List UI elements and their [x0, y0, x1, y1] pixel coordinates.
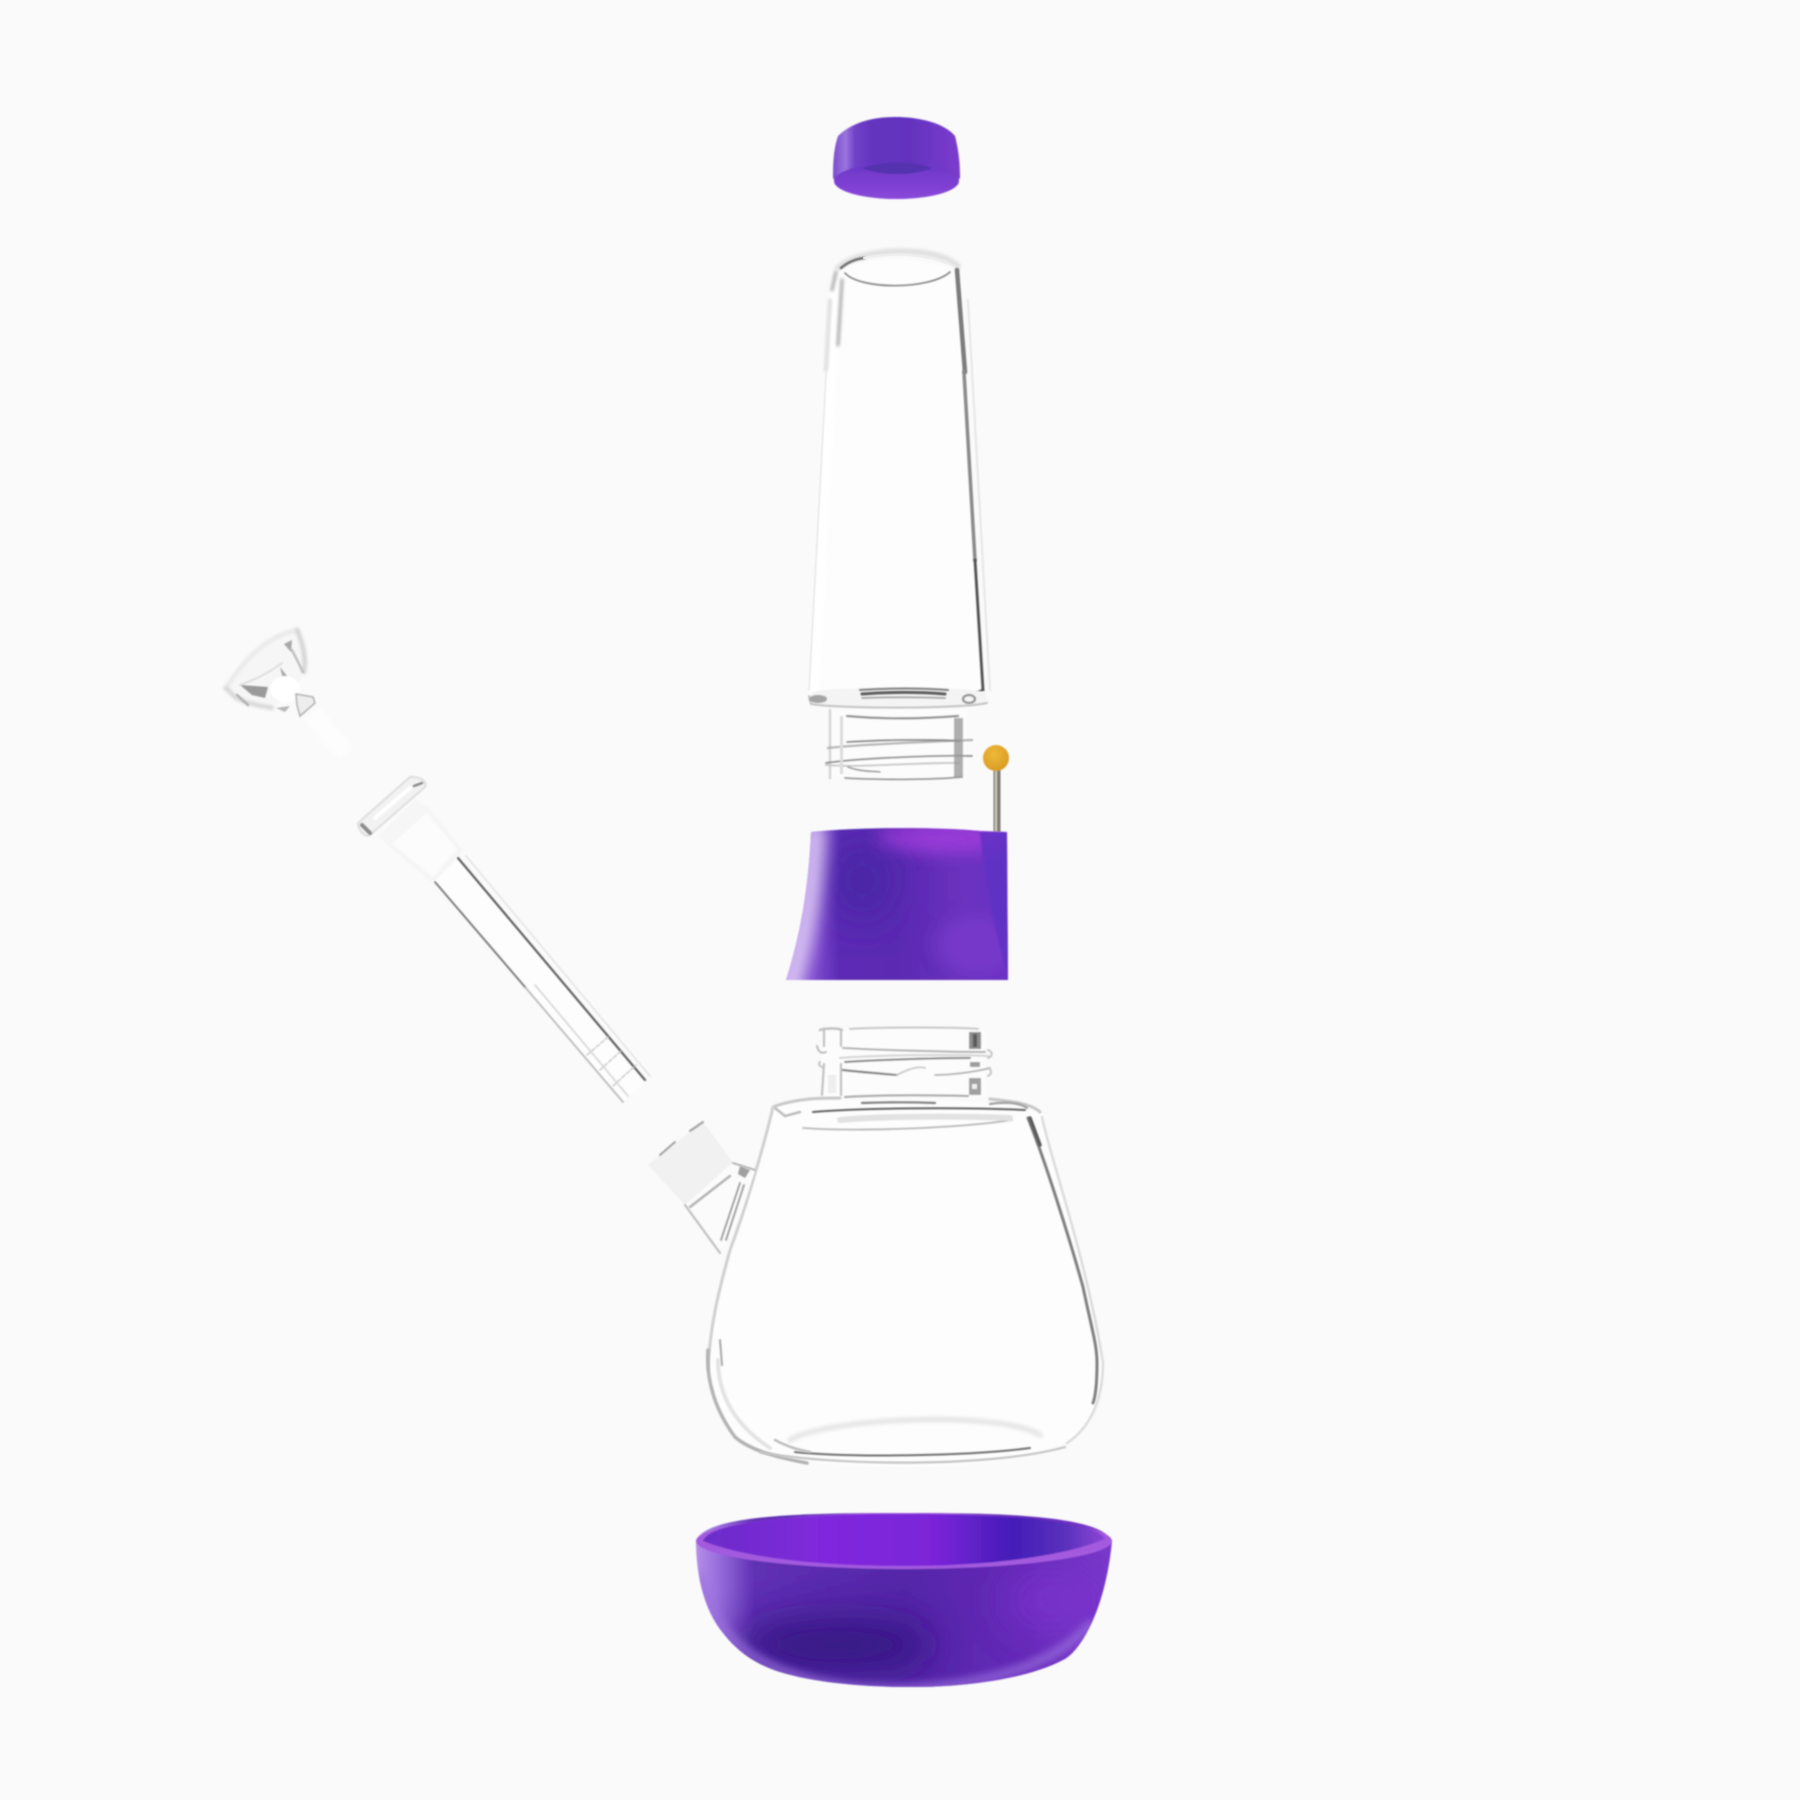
- purple silicone base bowl: [696, 1513, 1115, 1689]
- bowl shading: [700, 1574, 1102, 1688]
- collar body: [786, 828, 1008, 980]
- bottle shoulder: [775, 1095, 1040, 1130]
- tube interior: [810, 260, 984, 690]
- cap recess: [862, 163, 932, 174]
- cap body: [833, 117, 960, 199]
- tube right wall: [957, 270, 965, 372]
- cap inner rim: [834, 163, 959, 199]
- pin ball: [983, 745, 1009, 771]
- downstem frosted joint: [387, 807, 460, 880]
- bottle walls: [1028, 1118, 1097, 1403]
- bowl interior: [703, 1514, 1105, 1566]
- glass downstem: [358, 777, 650, 1102]
- bottle threaded neck: [817, 1028, 992, 1097]
- purple silicone cap: [833, 117, 960, 199]
- downstem flange: [358, 777, 426, 836]
- downstem tube: [433, 858, 647, 1102]
- bowl rim: [696, 1513, 1112, 1569]
- bottle floor: [790, 1420, 1040, 1440]
- bowl outer body: [696, 1513, 1112, 1687]
- glass base bottle: [648, 1028, 1103, 1467]
- tube flange: [810, 688, 988, 708]
- bowl joint: [296, 694, 315, 716]
- downstem grooves: [587, 1037, 636, 1086]
- purple silicone collar: [786, 822, 1015, 985]
- yellow ball pin: [983, 745, 1009, 832]
- pin rod: [994, 770, 1000, 832]
- collar shading: [790, 822, 1015, 985]
- tube left wall shading: [838, 280, 842, 345]
- bowl frosted stem: [303, 707, 353, 760]
- tube threaded neck: [826, 710, 972, 782]
- bottle side joint: [685, 1162, 755, 1253]
- exploded product illustration: [223, 116, 1113, 1688]
- bowl cone shards: [237, 640, 303, 712]
- bottle interior: [708, 1099, 1103, 1467]
- tube top lip: [838, 251, 958, 268]
- bowl cone: [225, 630, 305, 708]
- tall glass tube: [809, 251, 990, 782]
- glass bowl piece: [225, 630, 353, 760]
- tube left white band: [814, 285, 835, 690]
